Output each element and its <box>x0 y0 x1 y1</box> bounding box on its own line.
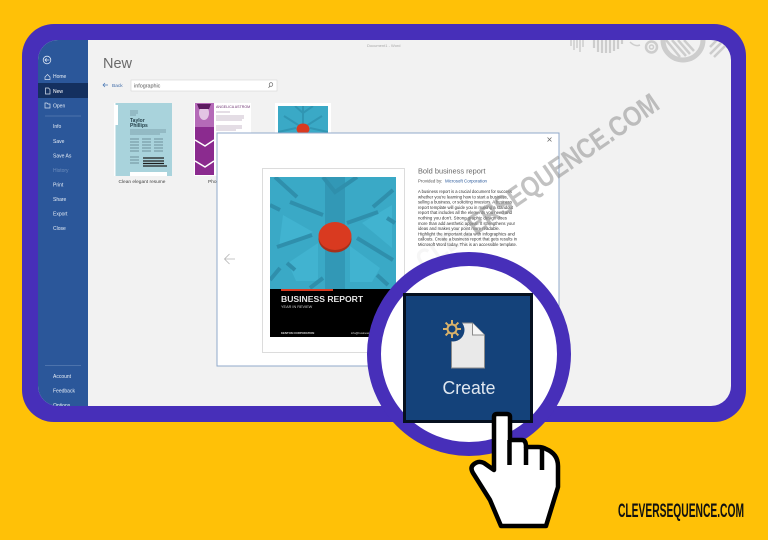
template description: report that includes all the elements you need and <box>418 210 512 215</box>
sidebar menu labels: History <box>53 168 69 174</box>
sidebar menu labels: Close <box>53 226 66 232</box>
sidebar menu labels: Info <box>53 124 62 130</box>
template title: Bold business report <box>418 166 485 176</box>
template description: ideas and makes your point more readable. <box>418 226 500 231</box>
magnifier circle <box>374 259 564 449</box>
template description: more than add aesthetic appeal. It strengthens your <box>418 221 515 226</box>
sidebar menu labels: Options <box>53 403 71 409</box>
back link: Back <box>112 83 123 89</box>
template description: whether you're learning how to start a business, <box>418 194 508 199</box>
template: photo resume: ANGELICA ASTROM <box>216 105 250 109</box>
sidebar menu labels: Open <box>53 104 65 110</box>
template description <box>418 189 517 247</box>
template: photo resume <box>194 103 251 176</box>
report cover preview <box>262 168 404 352</box>
red centre disc <box>318 236 352 252</box>
icon: pointing hand cursor <box>472 414 558 526</box>
window title: Document1 - Word <box>367 43 400 48</box>
template: clean elegant resume: Taylor <box>130 118 145 124</box>
label: clean elegant resume: Clean elegant resume <box>119 179 166 185</box>
previous arrow <box>224 254 235 264</box>
icon: new document with gear <box>442 318 484 368</box>
back link <box>102 82 123 88</box>
template description: selling a business, or soliciting investors. A business <box>418 200 513 205</box>
sidebar menu labels: Print <box>53 182 64 188</box>
cover black title band <box>270 289 396 337</box>
sidebar menu labels: Home <box>53 74 67 80</box>
selected New row <box>38 83 88 98</box>
sidebar <box>38 40 88 409</box>
sidebar menu labels: Feedback <box>53 388 75 394</box>
template description: callouts. Create a business report that gets results in <box>418 237 517 242</box>
template: clean elegant resume: Phillips <box>130 123 148 129</box>
purple screen frame <box>22 24 746 422</box>
Create button enlarged <box>404 294 532 422</box>
Word window screenshot <box>38 20 731 409</box>
sidebar dividers <box>45 116 81 366</box>
label: photo template: Pho <box>208 179 217 185</box>
cover black title band: KENTON CORPORATION <box>281 331 314 335</box>
close icon <box>548 138 552 142</box>
sidebar menu labels: Share <box>53 197 67 203</box>
button label Create: Create <box>442 377 496 398</box>
template description: Microsoft Word today. This is an accessible template. <box>418 242 517 247</box>
sidebar menu labels: New <box>53 89 63 95</box>
back button icon <box>43 56 51 64</box>
page heading New: New <box>103 56 133 72</box>
template description: report template will guide you in making a standout <box>418 205 514 210</box>
sidebar icons <box>45 74 50 108</box>
cover black title band: BUSINESS REPORT <box>281 294 364 304</box>
sidebar menu labels: Export <box>53 212 68 218</box>
template: bold business report thumbnail <box>275 103 331 132</box>
template description: A business report is a crucial document for success <box>418 189 513 194</box>
provider line <box>418 179 487 184</box>
provider line: Provided by: <box>418 178 442 184</box>
cover artwork <box>270 177 396 289</box>
template description: Highlight the important data with infographics and <box>418 231 515 236</box>
window background <box>38 40 731 406</box>
cover black title band: YEAR IN REVIEW <box>281 305 313 309</box>
template description: nothing you don't. Strong graphic design does <box>418 216 508 220</box>
sidebar menu labels: Save As <box>53 154 72 160</box>
cover black title band: info@business.com <box>351 331 376 335</box>
template: clean elegant resume <box>114 103 172 176</box>
sidebar menu labels: Save <box>53 139 65 145</box>
provider line: Microsoft Corporation <box>445 178 488 184</box>
watermark: CLEVERSEQUENCE.COM <box>410 87 665 276</box>
decorative grey artwork top right <box>570 40 726 62</box>
search box: infographic <box>134 84 161 90</box>
template preview dialog <box>217 133 559 366</box>
sidebar menu labels: Account <box>53 374 72 380</box>
sidebar menu labels <box>53 74 75 409</box>
search box <box>131 80 277 91</box>
